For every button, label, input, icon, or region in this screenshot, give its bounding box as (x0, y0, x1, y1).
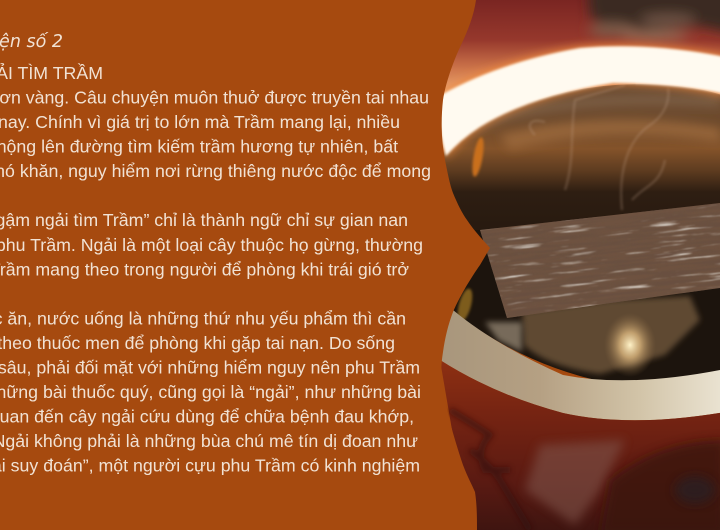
photo: glowing white rim (439, 45, 720, 158)
photo: dark interior beneath the wood (440, 230, 720, 385)
paragraph 2: phu Trầm. Ngải là một loại cây thuộc họ gừng, thường (0, 235, 423, 255)
paragraph 3: Ngải không phải là những bùa chú mê tín dị đoan như (0, 431, 418, 451)
paragraph 2: Trầm mang theo trong người để phòng khi trái gió trở (0, 260, 409, 280)
paragraph 2 (0, 210, 423, 280)
photo: bowl interior (440, 84, 720, 300)
paragraph 1: ơn vàng. Câu chuyện muôn thuở được truyền tai nhau (0, 88, 429, 108)
photo: glowing orange reflection (470, 137, 486, 177)
photo: ash at the left (485, 322, 522, 352)
paragraph 3: theo thuốc men để phòng khi gặp tai nạn. Do sống (0, 333, 395, 353)
photo: agarwood plank (480, 203, 720, 318)
paragraph 1 (0, 88, 431, 181)
photo: ash lump (522, 296, 700, 374)
photo: yellow fleck on the inner wall (455, 287, 475, 323)
paragraph 3: sâu, phải đối mặt với những hiểm nguy nên phu Trầm (0, 358, 420, 378)
photo: rising smoke (530, 85, 668, 210)
orange wave panel edge (0, 0, 490, 530)
heading: episode label: ện số 2 (0, 31, 63, 52)
paragraph 3: ải suy đoán”, một người cựu phu Trầm có kinh nghiệm (0, 456, 420, 476)
photo: cream lower rim (440, 310, 720, 420)
paragraph 3: quan đến cây ngải cứu dùng để chữa bệnh đau khớp, (0, 406, 414, 426)
paragraph 1: nay. Chính vì giá trị to lớn mà Trầm mang lại, nhiều (0, 112, 400, 132)
paragraph 2: gậm ngải tìm Trầm” chỉ là thành ngữ chỉ sự gian nan (0, 210, 408, 230)
photo: incense bowl with agarwood (430, 0, 720, 530)
paragraph 3 (0, 308, 421, 476)
photo: lit spot on the ash (604, 313, 656, 377)
paragraph 3: c ăn, nước uống là những thứ nhu yếu phẩm thì cần (0, 308, 406, 328)
photo: brown streaks inside the bowl (470, 100, 720, 150)
paragraph 1: nó khăn, nguy hiểm nơi rừng thiêng nước độc để mong (0, 161, 431, 181)
text block: article (0, 31, 431, 476)
paragraph 3: hững bài thuốc quý, cũng gọi là “ngải”, như những bài (0, 382, 421, 402)
photo: red bowl body (440, 360, 720, 530)
photo: red backdrop above the bowl (430, 0, 720, 100)
photo: bowl painted decoration (450, 410, 720, 530)
photo: dark smoke in the top right (588, 0, 720, 41)
paragraph 1: nộng lên đường tìm kiếm trầm hương tự nhiên, bất (0, 136, 398, 156)
